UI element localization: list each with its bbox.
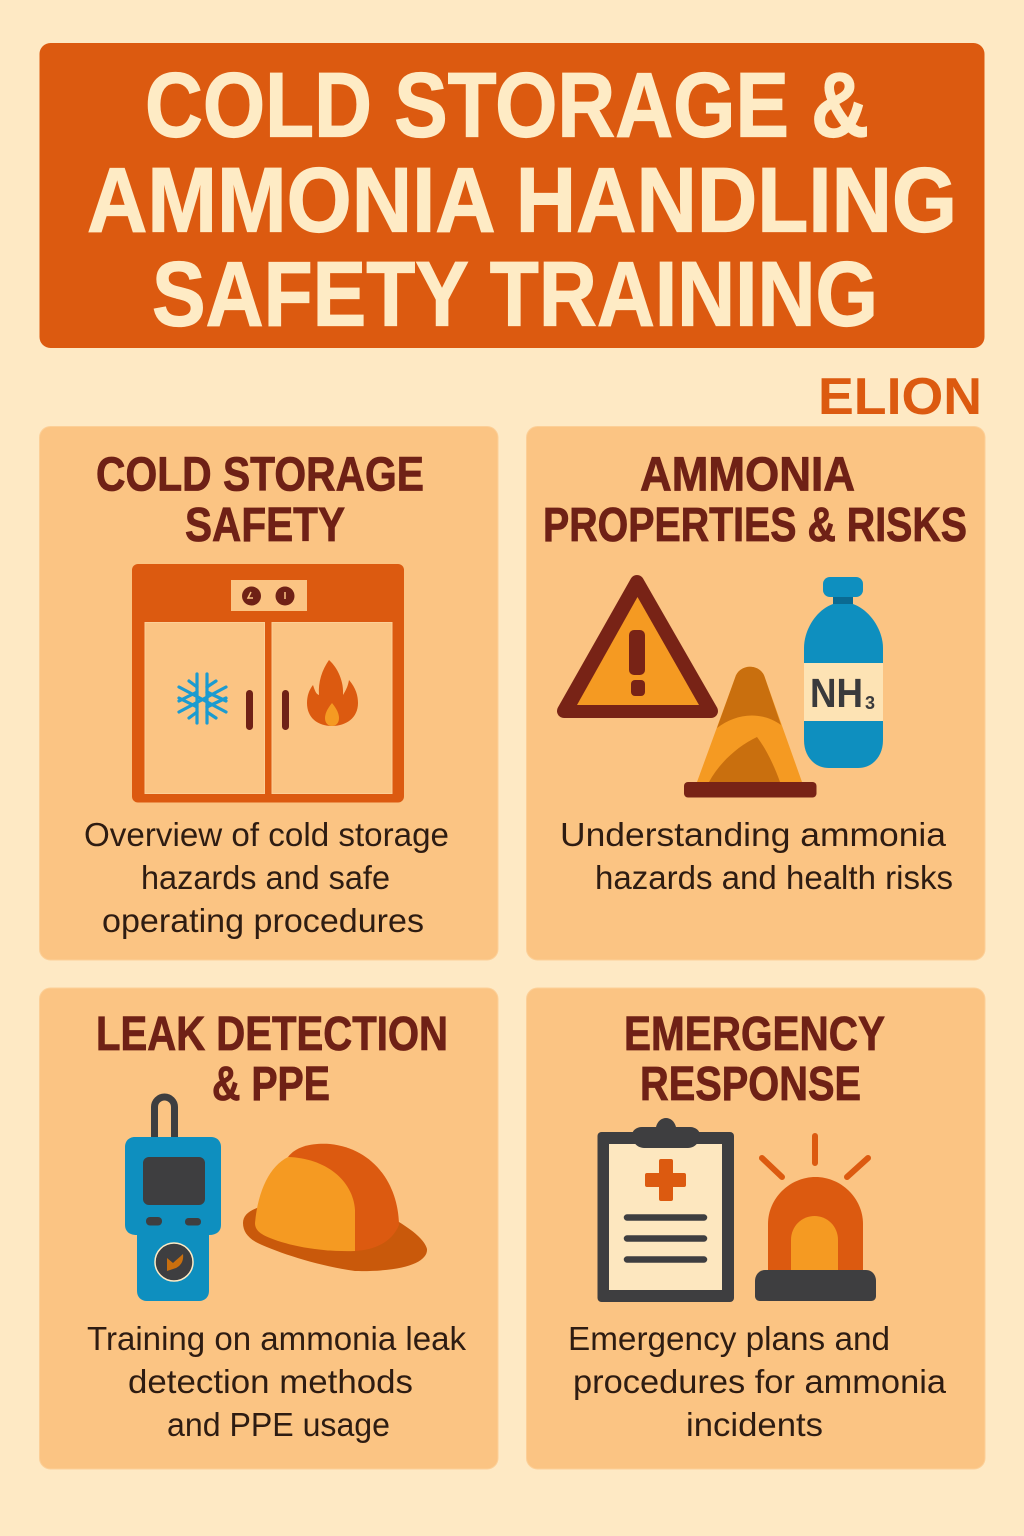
description: leak detection and PPE: and PPE usage <box>167 1406 390 1443</box>
description: cold storage safety: Overview of cold storage <box>84 816 449 853</box>
icon: snowflake <box>179 674 226 723</box>
description: ammonia properties and risks: hazards and health risks <box>595 859 953 896</box>
title banner <box>40 43 984 348</box>
heading: cold storage safety: COLD STORAGE <box>96 448 424 502</box>
icon: ammonia bottle <box>804 577 883 768</box>
icon: ammonia bottle: NH <box>810 670 863 716</box>
brand name: ELION <box>818 368 982 426</box>
description: cold storage safety: hazards and safe <box>141 859 390 896</box>
description: ammonia properties and risks: Understanding ammonia <box>560 816 947 853</box>
icon: ammonia bottle: 3 <box>865 693 875 713</box>
icon: warning triangle <box>564 582 711 711</box>
heading: cold storage safety <box>96 448 424 552</box>
icon: alarm beacon <box>755 1136 876 1301</box>
description: cold storage safety <box>84 816 449 939</box>
heading: emergency response: EMERGENCY <box>624 1008 885 1061</box>
title banner: AMMONIA HANDLING <box>87 150 957 252</box>
heading: leak detection and PPE: & PPE <box>212 1058 330 1111</box>
icon: clipboard <box>598 1118 734 1302</box>
icon: gas detector <box>125 1097 221 1301</box>
description: leak detection and PPE: detection methods <box>128 1363 413 1400</box>
title banner: COLD STORAGE & <box>145 54 869 156</box>
icon: flame <box>307 660 358 726</box>
description: emergency response: incidents <box>686 1406 823 1443</box>
heading: ammonia properties and risks <box>543 448 967 552</box>
heading: emergency response: RESPONSE <box>640 1058 861 1111</box>
title banner: SAFETY TRAINING <box>152 244 878 346</box>
heading: leak detection and PPE: LEAK DETECTION <box>96 1008 448 1061</box>
heading: leak detection and PPE <box>96 1008 448 1111</box>
heading: cold storage safety: SAFETY <box>185 499 345 552</box>
panel: ammonia properties and risks <box>526 426 985 960</box>
heading: emergency response <box>624 1008 885 1111</box>
description: cold storage safety: operating procedures <box>102 902 424 939</box>
panel: emergency response <box>526 988 985 1469</box>
panel: leak detection and PPE <box>40 988 498 1469</box>
description: emergency response: Emergency plans and <box>568 1320 890 1357</box>
description: leak detection and PPE <box>87 1320 467 1443</box>
heading: ammonia properties and risks: AMMONIA <box>640 448 855 502</box>
description: ammonia properties and risks <box>560 816 953 896</box>
description: emergency response <box>568 1320 947 1443</box>
panel: cold storage safety <box>40 426 498 960</box>
icon: safety cone <box>684 667 816 798</box>
description: emergency response: procedures for ammonia <box>573 1363 947 1400</box>
description: leak detection and PPE: Training on ammonia leak <box>87 1320 467 1357</box>
icon: cold storage unit <box>132 564 404 802</box>
icon: hard hat <box>243 1144 427 1271</box>
